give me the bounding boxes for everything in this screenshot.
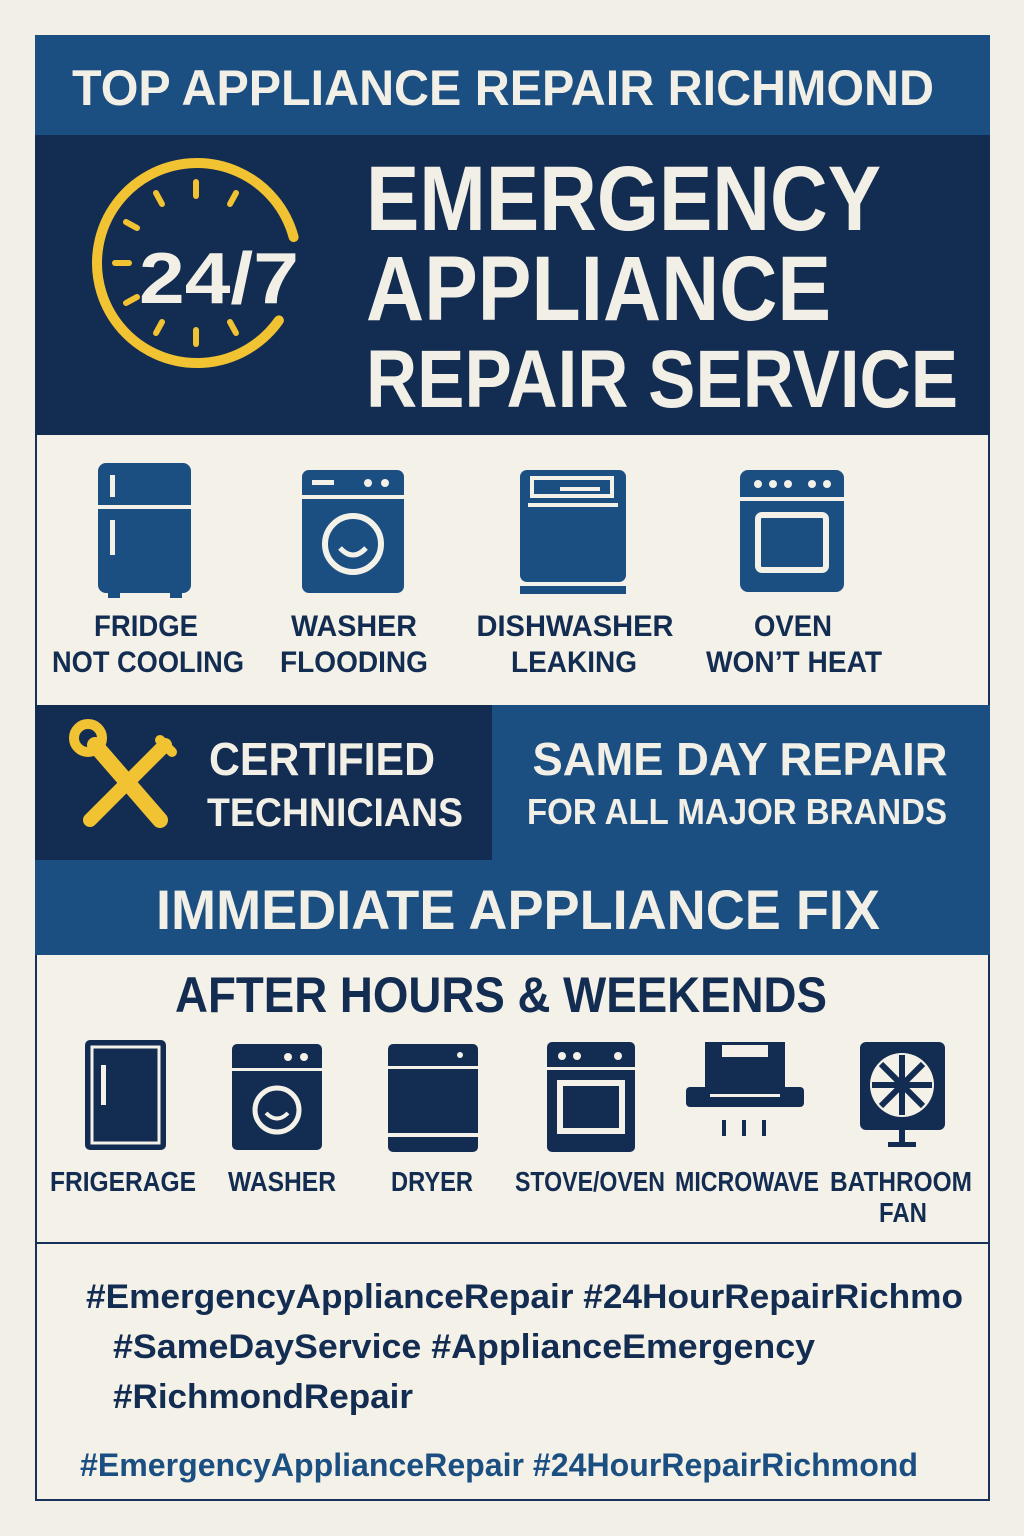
panel: certified technicians [35,705,492,860]
icon: tools [74,724,172,820]
title: APPLIANCE [366,238,831,340]
icon: 24/7 clock: 24/7 [139,239,299,319]
labels: OVEN [754,610,832,643]
icon: range hood [686,1042,804,1136]
labels: WASHER [228,1166,336,1197]
labels [52,610,882,679]
icon: oven [740,470,844,592]
hashtags [80,1278,963,1483]
hashtags: #EmergencyApplianceRepair #24HourRepairRichmo [86,1278,963,1316]
labels: WASHER [291,610,417,643]
icon: dishwasher [520,470,626,594]
top bar: TOP APPLIANCE REPAIR RICHMOND [72,60,934,116]
panel: same day repair: FOR ALL MAJOR BRANDS [527,791,947,832]
labels [50,1166,972,1228]
heading: after hours: AFTER HOURS & WEEKENDS [175,967,827,1023]
heading: immediate fix: IMMEDIATE APPLIANCE FIX [156,878,880,941]
labels: MICROWAVE [675,1166,819,1197]
top bar [35,35,990,135]
hashtags: #RichmondRepair [113,1378,413,1416]
hero band [35,135,990,435]
labels: BATHROOM [830,1166,972,1197]
labels: FRIGERAGE [50,1166,196,1197]
panel: certified technicians: TECHNICIANS [207,791,463,835]
heading: immediate fix [35,860,990,955]
icon: fridge [85,1040,166,1150]
labels: WON’T HEAT [706,646,882,679]
labels: LEAKING [511,646,637,679]
icon: washer [302,470,404,593]
icon: fridge [98,463,191,598]
labels: NOT COOLING [52,646,244,679]
hashtags: #EmergencyApplianceRepair #24HourRepairRichmond [80,1447,918,1483]
icon: dryer [388,1044,478,1152]
icon: bathroom fan [860,1042,945,1147]
labels: FAN [879,1197,927,1228]
title: EMERGENCY [366,148,881,250]
panel: appliance list [50,1040,972,1228]
panel: same day repair [492,705,990,860]
labels: DISHWASHER [476,610,674,643]
panel: problems [52,463,882,679]
labels: STOVE/OVEN [515,1166,665,1197]
labels: DRYER [391,1166,473,1197]
labels: FLOODING [280,646,428,679]
panel: certified technicians: CERTIFIED [209,733,435,785]
panel: same day repair: SAME DAY REPAIR [532,733,948,785]
hashtags: #SameDayService #ApplianceEmergency [113,1328,815,1366]
icon: stove [547,1042,635,1152]
title [366,148,958,425]
icon: washer [232,1044,322,1150]
labels: FRIDGE [94,610,198,643]
icon: 24/7 clock [97,163,299,363]
